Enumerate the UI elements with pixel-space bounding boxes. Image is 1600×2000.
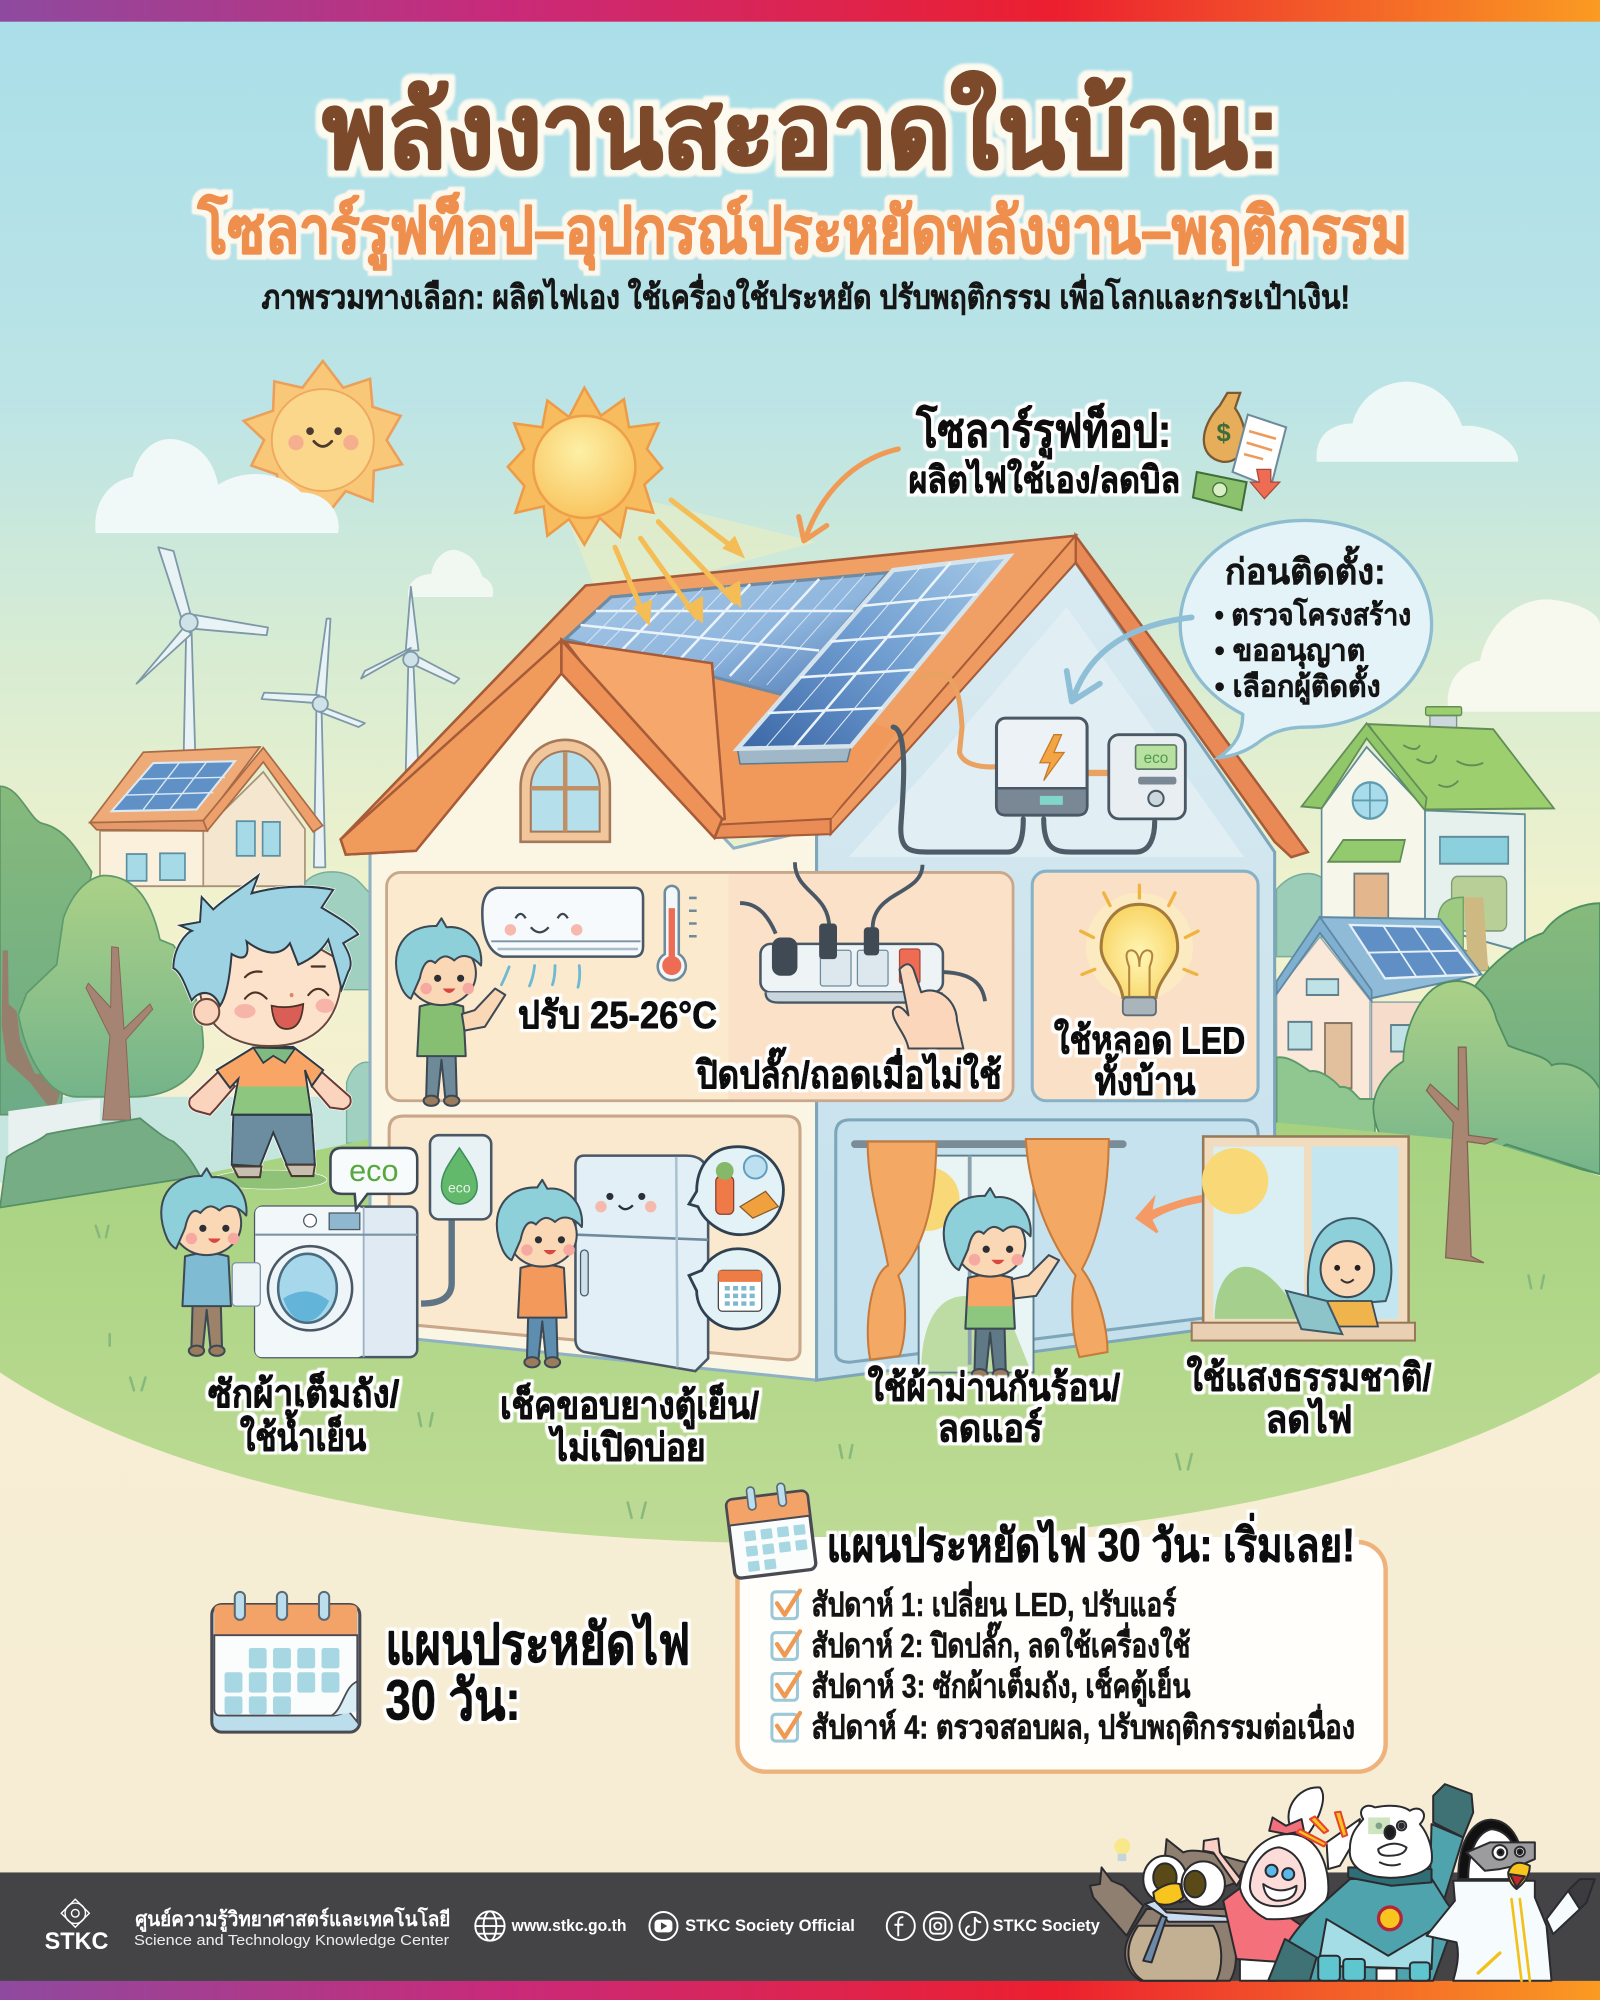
mascot: bear (1268, 1784, 1473, 1981)
callout: rooftop solar: โซลาร์รูฟท็อป: (915, 402, 1171, 459)
icon: globe (475, 1911, 505, 1941)
label: curtains: ลดแอร์ (938, 1406, 1043, 1450)
trunk (86, 947, 153, 1120)
footer org name (134, 1906, 450, 1949)
power strip (740, 862, 985, 1003)
washing machine (255, 1207, 417, 1357)
window with curtains (855, 1139, 1123, 1372)
blue-roof house (1277, 917, 1482, 1099)
left scene background (0, 747, 370, 1204)
wall inner light (848, 607, 1244, 857)
bubble: calendar (689, 1249, 780, 1329)
plan heading left: 30 วัน: (385, 1668, 521, 1731)
LED bulb (1081, 885, 1198, 1015)
dormer window (521, 740, 610, 842)
room: lower right (836, 1120, 1258, 1362)
grass tufts (96, 1226, 1544, 1518)
footer logo: STKC (45, 1928, 108, 1955)
footer band (0, 1872, 1600, 1983)
thermometer (658, 886, 697, 980)
label: daylight (1187, 1354, 1432, 1441)
footer org name: Science and Technology Knowledge Center (134, 1933, 449, 1949)
sunny window (1192, 1136, 1415, 1341)
icon: main sun (508, 388, 662, 545)
label: LED: ใช้หลอด LED (1054, 1018, 1245, 1063)
white fence (8, 1099, 100, 1156)
left neighbour house (90, 747, 323, 886)
kid checking fridge (497, 1180, 588, 1367)
roof (341, 536, 1308, 857)
tree: front right (1373, 981, 1600, 1179)
icons: social (887, 1912, 988, 1940)
icon: smiling sun (244, 361, 402, 517)
bullet list: • ขออนุญาต (1215, 635, 1365, 669)
tree: dark right (1473, 903, 1600, 1174)
mascot: lightbulb (1114, 1838, 1130, 1861)
hedge behind big kid (305, 872, 370, 1143)
youtube name: STKC Society Official (685, 1916, 855, 1935)
icon: money and bill: $ (1217, 419, 1231, 447)
callout: rooftop solar (908, 402, 1180, 500)
kid adjusting AC (396, 918, 505, 1106)
cloud: right (1317, 382, 1518, 462)
label: curtains: ใช้ผ้าม่านกันร้อน/ (868, 1365, 1121, 1410)
kid with laundry (161, 1168, 260, 1356)
bush left (0, 1118, 200, 1207)
label: fridge: ไม่เปิดบ่อย (548, 1424, 706, 1469)
arrow: solar callout (799, 449, 898, 541)
label: curtains (868, 1365, 1121, 1450)
cables (893, 674, 1155, 852)
room: upper right (1032, 871, 1258, 1101)
label: laundry: ใช้น้ำเย็น (240, 1409, 366, 1459)
tagline: ภาพรวมทางเลือก: ผลิตไฟเอง ใช้เครื่องใช้ประหยัด ปรับพฤติกรรม เพื่อโลกและกระเป๋าเงิน! (262, 274, 1350, 317)
arrow: blue to inverter (1067, 617, 1192, 702)
solar panels (565, 556, 1009, 764)
sun beam (561, 495, 817, 599)
bottom gradient bar (0, 1981, 1600, 2000)
bullet list: • เลือกผู้ติดตั้ง (1215, 664, 1381, 704)
right scene background (1277, 707, 1600, 1179)
cream wall (370, 666, 817, 1380)
dormer roof (341, 640, 831, 855)
icon: money and bill (1193, 393, 1286, 510)
footer logo (45, 1899, 108, 1955)
bubble: food (689, 1147, 783, 1235)
room: upper left (387, 872, 1013, 1101)
small calendar icon (725, 1480, 816, 1579)
tree: front (18, 875, 203, 1097)
callout: rooftop solar: ผลิตไฟใช้เอง/ลดบิล (908, 457, 1180, 500)
grass patch (200, 1139, 370, 1204)
label: fridge: เช็คขอบยางตู้เย็น/ (500, 1382, 759, 1429)
checklist text: สัปดาห์ 1: เปลี่ยน LED, ปรับแอร์ (811, 1581, 1177, 1624)
orange arrow to curtains (1137, 1196, 1201, 1232)
website: www.stkc.go.th (511, 1916, 626, 1935)
cloud: small (408, 550, 493, 597)
hand pressing switch (893, 964, 963, 1048)
checklist text: สัปดาห์ 4: ตรวจสอบผล, ปรับพฤติกรรมต่อเนื่อง (811, 1704, 1355, 1747)
top gradient bar (0, 0, 1600, 22)
eco speech bubble: eco (349, 1154, 399, 1188)
sunlight arrows (615, 500, 745, 626)
cloud: left (95, 439, 339, 533)
mascots (1090, 1784, 1595, 1981)
eco water heater (421, 1135, 491, 1304)
checklist icons (772, 1591, 800, 1741)
label: laundry: ซักผ้าเต็มถัง/ (208, 1371, 400, 1416)
mascot: owl (1090, 1838, 1247, 1981)
tree: dark back (0, 786, 92, 1115)
label: fridge (500, 1382, 759, 1469)
eco water heater: eco (448, 1180, 471, 1196)
checklist text (811, 1581, 1355, 1747)
main house (341, 536, 1308, 1380)
cloud: far right (1448, 599, 1600, 712)
plan heading left (385, 1611, 690, 1731)
green-roof house (1302, 707, 1554, 970)
hedge behind (1277, 874, 1322, 957)
footer org name: ศูนย์ความรู้วิทยาศาสตร์และเทคโนโลยี (135, 1906, 450, 1933)
label: LED (1054, 1018, 1245, 1103)
label: daylight: ใช้แสงธรรมชาติ/ (1187, 1354, 1432, 1399)
checklist text: สัปดาห์ 3: ซักผ้าเต็มถัง, เช็คตู้เย็น (811, 1666, 1191, 1708)
big calendar icon (212, 1592, 360, 1732)
eco speech bubble (330, 1148, 417, 1209)
label: LED: ทั้งบ้าน (1095, 1053, 1196, 1103)
air conditioner (482, 888, 643, 957)
callout bubble: before install (1180, 520, 1432, 758)
refrigerator (575, 1156, 708, 1371)
pale blue ground strip (0, 1097, 370, 1182)
right tree trunk (1426, 1047, 1497, 1263)
plan card (725, 1480, 1386, 1772)
top edge cover (734, 1537, 1359, 1550)
mascot: bunny (1223, 1787, 1360, 1981)
smart meter: eco (1144, 750, 1168, 767)
blue wall (817, 562, 1275, 1380)
mascot: penguin (1427, 1820, 1595, 1981)
callout bubble: before install: ก่อนติดตั้ง: (1225, 545, 1386, 592)
checklist text: สัปดาห์ 2: ปิดปลั๊ก, ลดใช้เครื่องใช้ (811, 1621, 1190, 1665)
label: unplug: ปิดปลั๊ก/ถอดเมื่อไม่ใช้ (695, 1046, 1002, 1097)
kid opening curtain (944, 1188, 1059, 1379)
title: พลังงานสะอาดในบ้าน: (323, 72, 1280, 190)
hedge front (1277, 1057, 1375, 1139)
inverter (996, 718, 1087, 815)
icon: youtube (649, 1912, 678, 1940)
big kid mascot (173, 875, 358, 1189)
green hill (0, 1122, 1600, 1543)
social name: STKC Society (993, 1916, 1101, 1935)
label: daylight: ลดไฟ (1266, 1396, 1352, 1441)
label: AC temperature: ปรับ 25-26°C (518, 994, 717, 1037)
room: lower left (389, 1116, 800, 1360)
subtitle: โซลาร์รูฟท็อป–อุปกรณ์ประหยัดพลังงาน–พฤติกรรม (197, 193, 1407, 271)
bullet list: • ตรวจโครงสร้าง (1215, 597, 1411, 632)
bullet list (1215, 597, 1411, 704)
label: laundry (208, 1371, 400, 1459)
smart meter (1109, 735, 1185, 819)
trunk left (2, 950, 63, 1113)
cool air (501, 966, 580, 987)
card heading: แผนประหยัดไฟ 30 วัน: เริ่มเลย! (827, 1513, 1355, 1571)
plan heading left: แผนประหยัดไฟ (385, 1611, 690, 1675)
wind turbines (137, 547, 459, 867)
